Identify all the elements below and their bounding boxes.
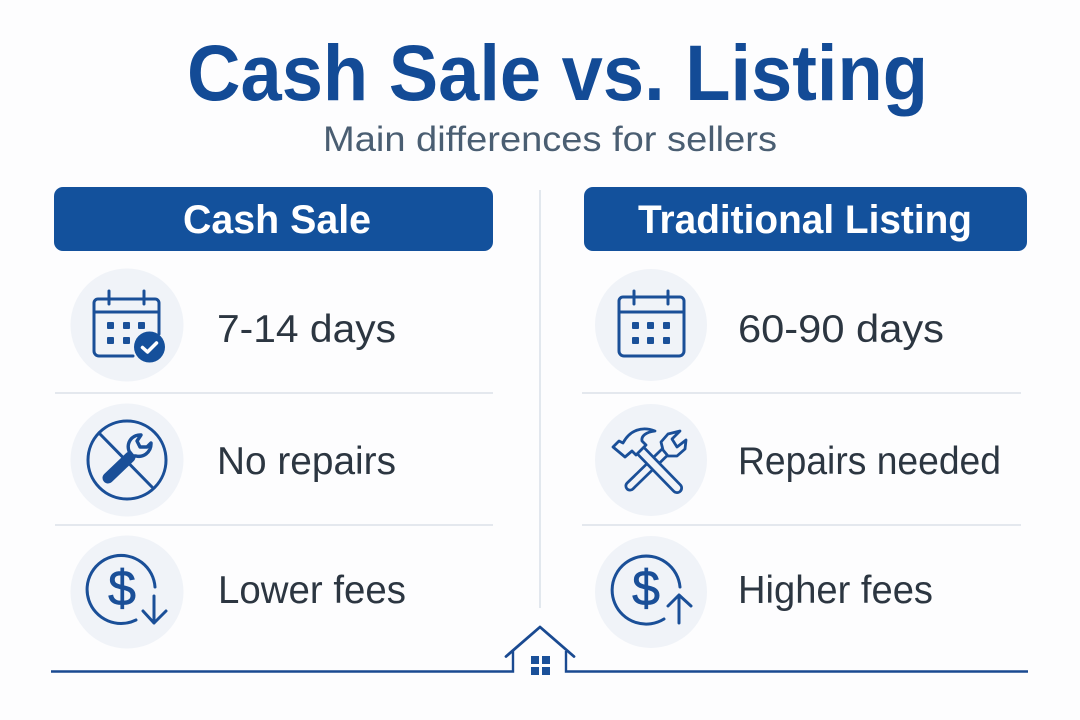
icon: crossed-out wrench [70,404,184,516]
icon: dollar with up arrow: $ [632,560,660,616]
title: Cash Sale vs. Listing [187,28,928,117]
row: 7-14 days [70,268,396,382]
label: repairs needed: Repairs needed [738,440,1001,483]
icon: calendar [595,269,707,381]
heading: cash sale [54,187,493,251]
heading: traditional listing [584,187,1027,251]
label: higher fees: Higher fees [738,569,933,612]
label: lower fees: Lower fees [218,569,406,612]
panel: cash sale [54,187,493,648]
footer baseline with house [51,627,1028,675]
icon: hammer and wrench [595,404,707,516]
heading: traditional listing: Traditional Listing [638,198,972,242]
row: no repairs [70,404,396,516]
label: 60-90 days: 60-90 days [738,308,944,351]
icon: dollar with down arrow [70,536,184,648]
row: lower fees [70,536,406,648]
row: repairs needed [595,404,1001,516]
icon: calendar with check [70,268,184,382]
label: no repairs: No repairs [217,440,396,483]
icon: house [506,627,574,675]
label: 7-14 days: 7-14 days [217,308,396,351]
row: higher fees [595,536,933,648]
icon: dollar with up arrow [595,536,707,648]
subtitle: Main differences for sellers [323,120,777,159]
panel: traditional listing [582,187,1027,648]
heading: cash sale: Cash Sale [183,198,371,242]
row: 60-90 days [595,269,944,381]
icon: dollar with down arrow: $ [108,560,136,616]
